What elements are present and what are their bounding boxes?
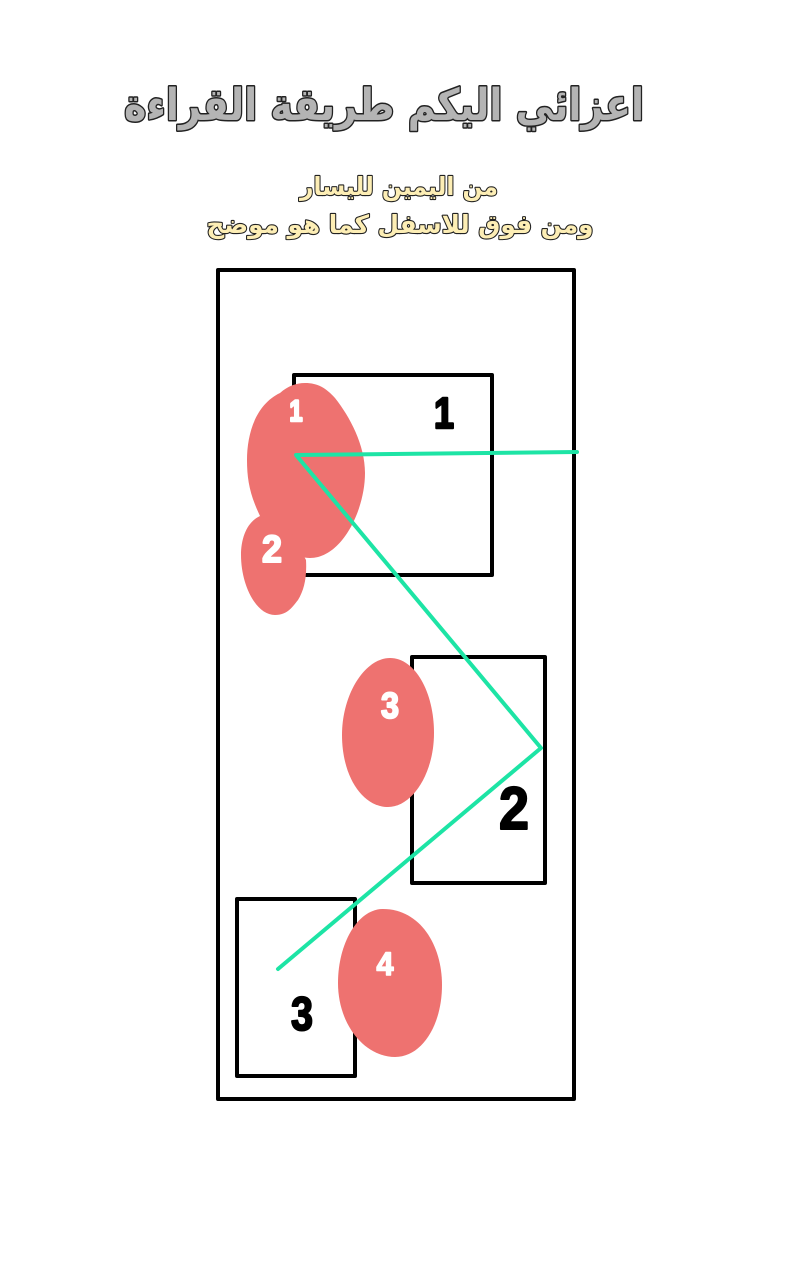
title: اعزائي اليكم طريقة القراءة: [124, 80, 644, 131]
box 3: [237, 899, 355, 1076]
page outline: [218, 270, 574, 1099]
subtitle line 1: من اليمين لليسار: [298, 172, 498, 202]
box number 3: 3: [291, 987, 313, 1040]
blob number 1: 1: [290, 395, 302, 428]
blob number 2: 2: [262, 529, 282, 571]
red blob 4: [338, 909, 442, 1057]
reading path line: [278, 452, 577, 969]
subtitle line 2: ومن فوق للاسفل كما هو موضح: [206, 210, 594, 240]
box number 1: 1: [434, 389, 454, 438]
box 1: [294, 375, 492, 575]
blob number 4: 4: [376, 946, 394, 982]
blob number 3: 3: [381, 685, 399, 726]
red blob 1: [247, 383, 365, 558]
red blob 2: [241, 516, 306, 615]
box number 2: 2: [499, 775, 529, 842]
page layout diagram: [218, 270, 577, 1099]
box 2: [412, 657, 545, 883]
red blob 3: [342, 658, 434, 807]
